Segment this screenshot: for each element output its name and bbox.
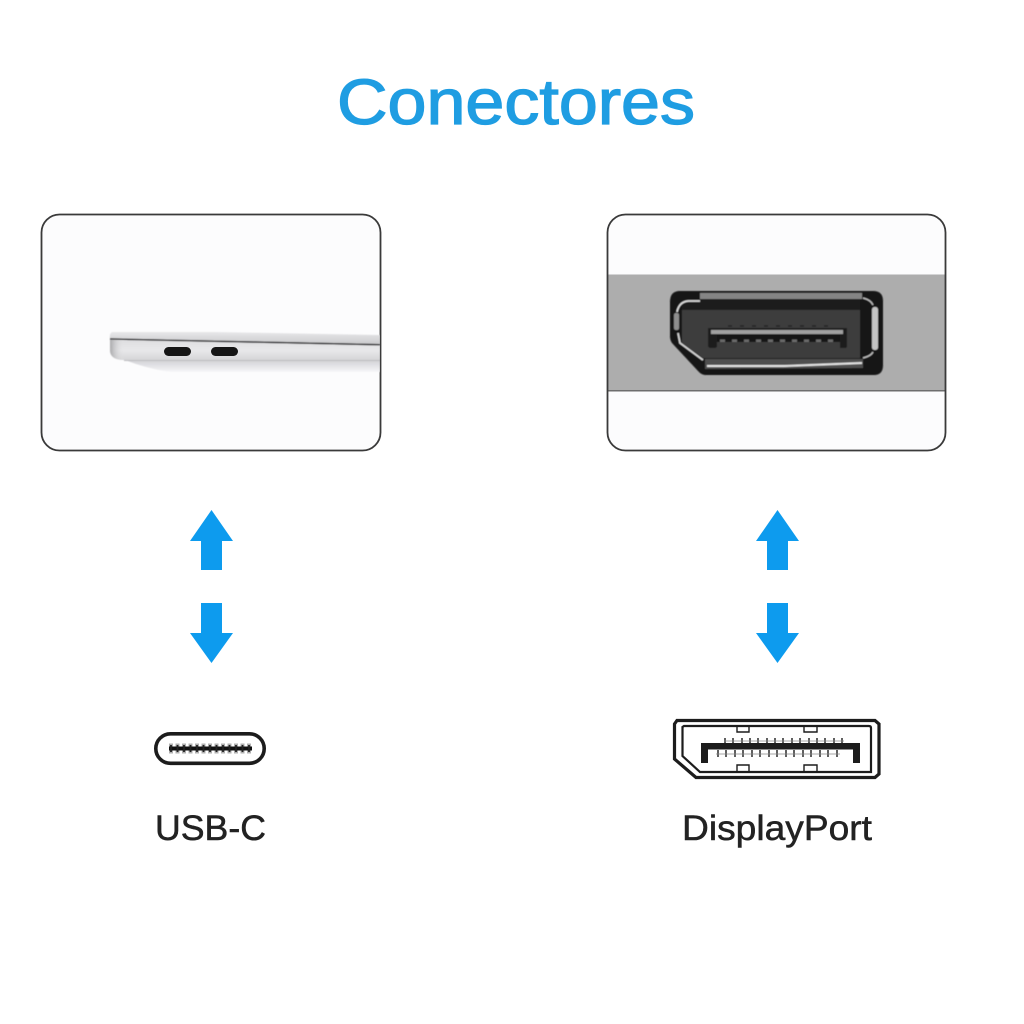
USB-C port 2: [211, 347, 238, 356]
icon: DisplayPort connector: [674, 720, 879, 778]
arrow: right down: [756, 603, 799, 663]
socket slot: [708, 328, 847, 348]
socket: [670, 291, 883, 375]
infographic canvas: [40, 78, 946, 848]
panel: laptop with USB-C ports: [42, 214, 380, 450]
USB-C port 1: [164, 347, 191, 356]
label: USB-C: USB-C: [155, 809, 266, 848]
arrow: left up: [190, 510, 233, 570]
label: DisplayPort: DisplayPort: [682, 809, 872, 848]
laptop side view: [110, 332, 380, 372]
icon: USB-C connector: [156, 734, 264, 763]
arrow: left down: [190, 603, 233, 663]
title: Conectores: [337, 66, 695, 138]
panel: DisplayPort socket photo: [608, 214, 946, 450]
arrow: right up: [756, 510, 799, 570]
grey device band: [608, 274, 945, 392]
